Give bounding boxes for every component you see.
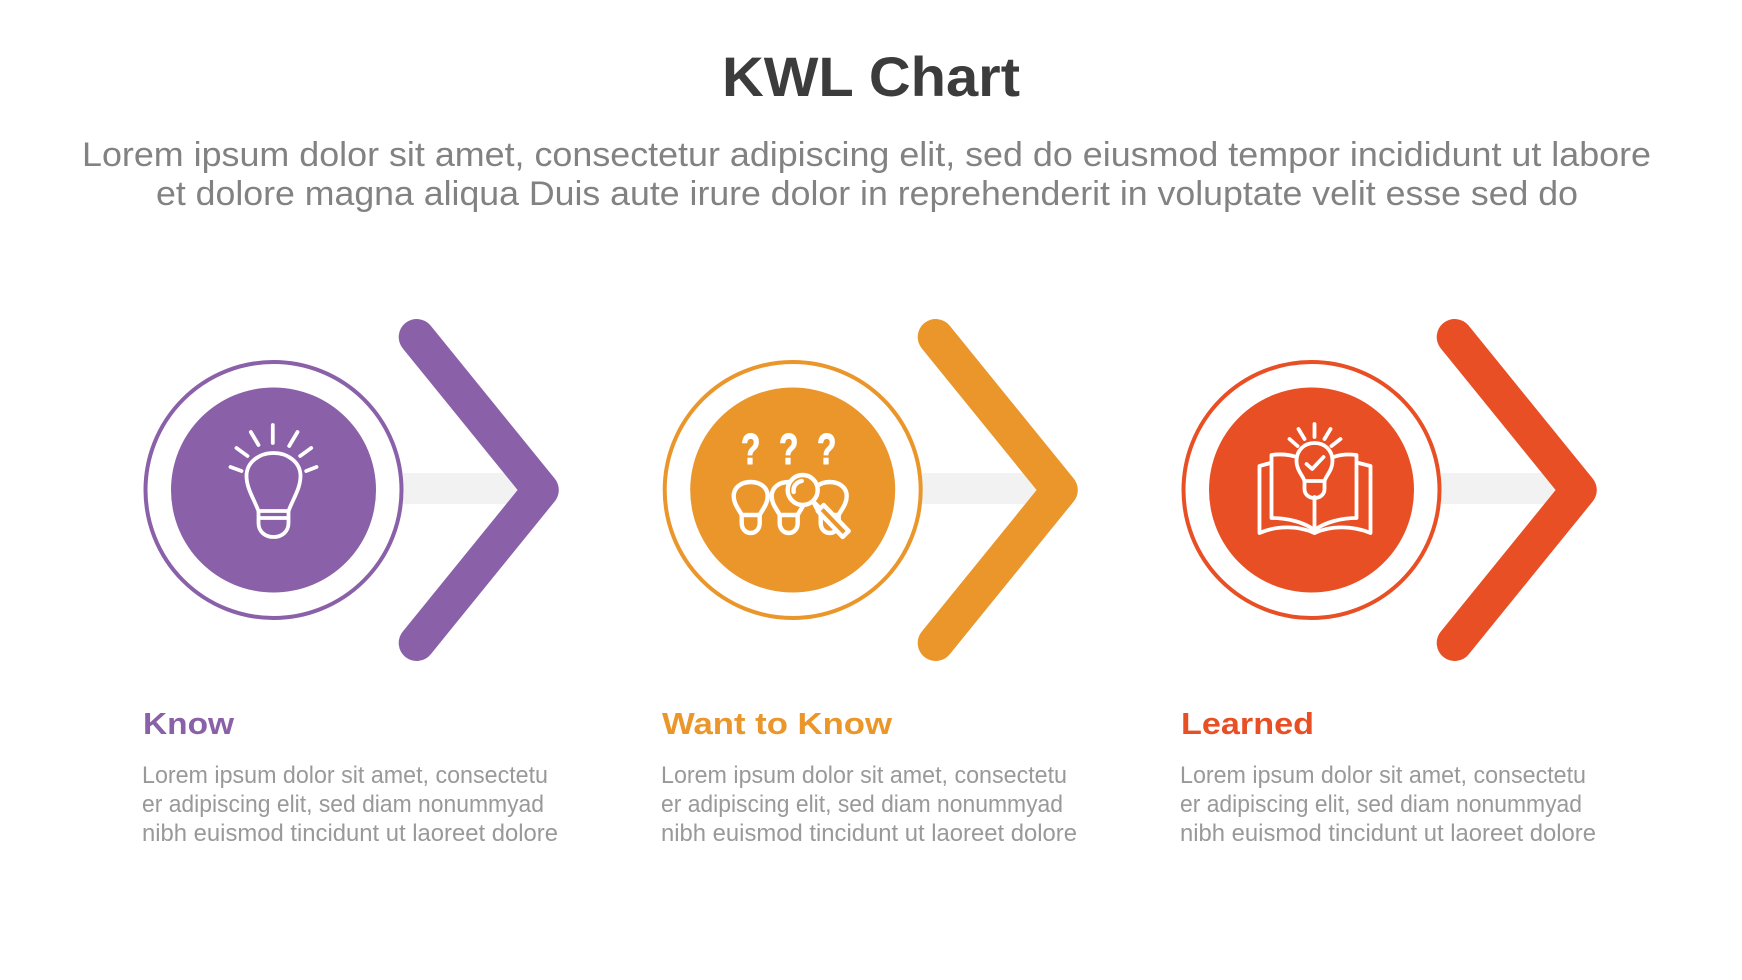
- description: Want to Know: [661, 762, 1077, 847]
- icon: question marks, bulbs and magnifier: [734, 425, 849, 537]
- icon: light bulb: [230, 425, 316, 537]
- connector bar: Learned: [1441, 473, 1561, 504]
- subtitle text: et dolore magna aliqua Duis aute irure dolor in reprehenderit in voluptate velit esse sed do: [156, 175, 1578, 213]
- chevron arrow: Want to Know: [936, 337, 1060, 643]
- description: Want to Know: nibh euismod tincidunt ut laoreet dolore: [661, 820, 1077, 847]
- icon: open book with light bulb: [1260, 424, 1370, 533]
- chevron arrow: Know: [417, 337, 541, 643]
- description: Learned: Lorem ipsum dolor sit amet, consectetu: [1180, 762, 1586, 789]
- description: Know: Lorem ipsum dolor sit amet, consectetu: [142, 762, 548, 789]
- description: Learned: [1180, 762, 1596, 847]
- description: Know: [142, 762, 558, 847]
- outer ring: Want to Know: [665, 362, 921, 618]
- description: Want to Know: Lorem ipsum dolor sit amet, consectetu: [661, 762, 1067, 789]
- inner circle: Want to Know: [690, 388, 895, 592]
- subtitle text: [82, 136, 1651, 213]
- icon: question marks, bulbs and magnifier: ?: [741, 425, 760, 474]
- description: Want to Know: er adipiscing elit, sed diam nonummyad: [661, 791, 1063, 818]
- heading: Learned: Learned: [1181, 706, 1314, 741]
- inner circle: Know: [171, 388, 376, 592]
- subtitle text: Lorem ipsum dolor sit amet, consectetur adipiscing elit, sed do eiusmod tempor incididunt ut labore: [82, 136, 1651, 174]
- connector bar: Know: [403, 473, 523, 504]
- icon: question marks, bulbs and magnifier: ?: [779, 425, 798, 474]
- description: Know: er adipiscing elit, sed diam nonummyad: [142, 791, 544, 818]
- inner circle: Learned: [1209, 388, 1414, 592]
- description: Know: nibh euismod tincidunt ut laoreet dolore: [142, 820, 558, 847]
- title: KWL Chart: [722, 45, 1020, 108]
- icon: question marks, bulbs and magnifier: ?: [817, 425, 836, 474]
- panel: Know: [142, 337, 558, 847]
- heading: Want to Know: Want to Know: [662, 706, 893, 741]
- connector bar: Want to Know: [922, 473, 1042, 504]
- panel: Want to Know: [661, 337, 1077, 847]
- outer ring: Know: [146, 362, 402, 618]
- heading: Know: Know: [143, 706, 235, 741]
- panel: Learned: [1180, 337, 1596, 847]
- chevron arrow: Learned: [1455, 337, 1579, 643]
- description: Learned: nibh euismod tincidunt ut laoreet dolore: [1180, 820, 1596, 847]
- description: Learned: er adipiscing elit, sed diam nonummyad: [1180, 791, 1582, 818]
- outer ring: Learned: [1184, 362, 1440, 618]
